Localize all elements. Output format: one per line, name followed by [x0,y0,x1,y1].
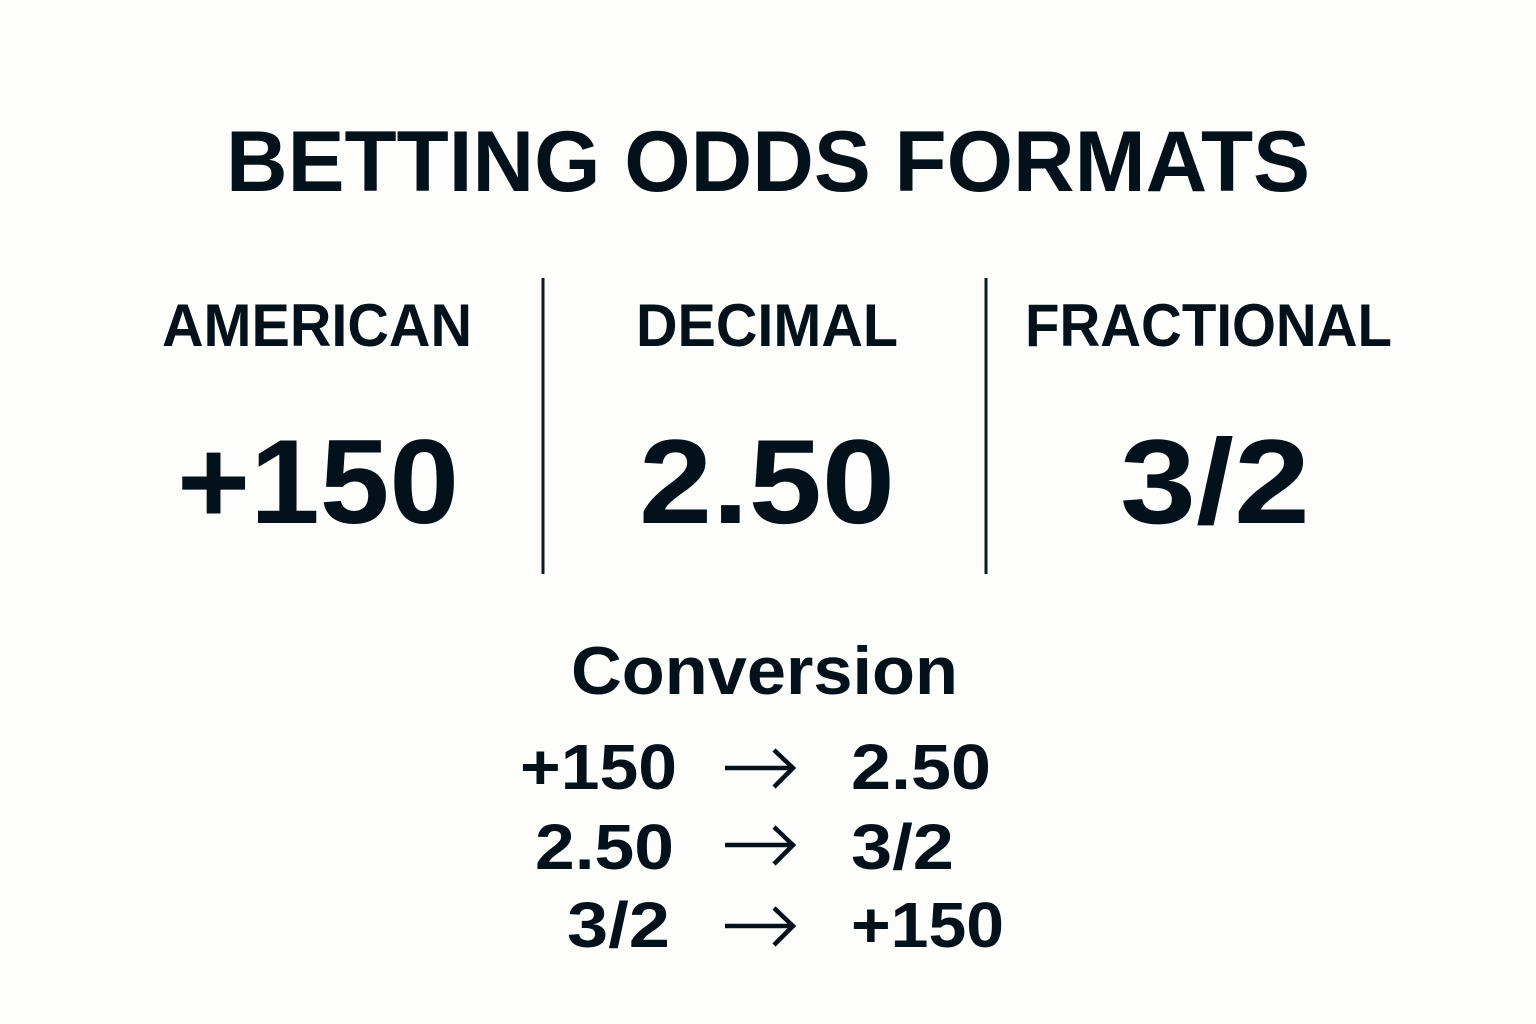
value: american odds: +150 [177,415,459,549]
conversion row 2 [535,811,954,883]
heading: conversion: Conversion [571,633,958,709]
conversion row 3 [567,889,1004,961]
conversion row 2: 2.50 [535,811,674,883]
panel: fractional format [1025,292,1392,549]
divider: american and decimal [542,278,544,574]
heading: fractional: FRACTIONAL [1025,292,1392,359]
arrow: row 1 [725,750,793,787]
value: decimal odds: 2.50 [639,415,895,549]
conversion row 1: 2.50 [851,731,991,803]
heading: decimal: DECIMAL [636,292,898,359]
heading: american: AMERICAN [162,292,472,359]
value: fractional odds: 3/2 [1120,415,1310,549]
conversion row 3: 3/2 [567,889,670,961]
panel: american format [162,292,472,549]
panel: decimal format [636,292,898,549]
panel: conversion [520,633,1004,961]
conversion row 1 [520,731,991,803]
conversion row 2: 3/2 [851,811,954,883]
divider: decimal and fractional [984,278,988,574]
conversion row 3: +150 [851,889,1004,961]
arrow: row 3 [725,908,793,945]
title: BETTING ODDS FORMATS [226,114,1310,210]
arrow: row 2 [725,827,793,864]
conversion row 1: +150 [520,731,677,803]
